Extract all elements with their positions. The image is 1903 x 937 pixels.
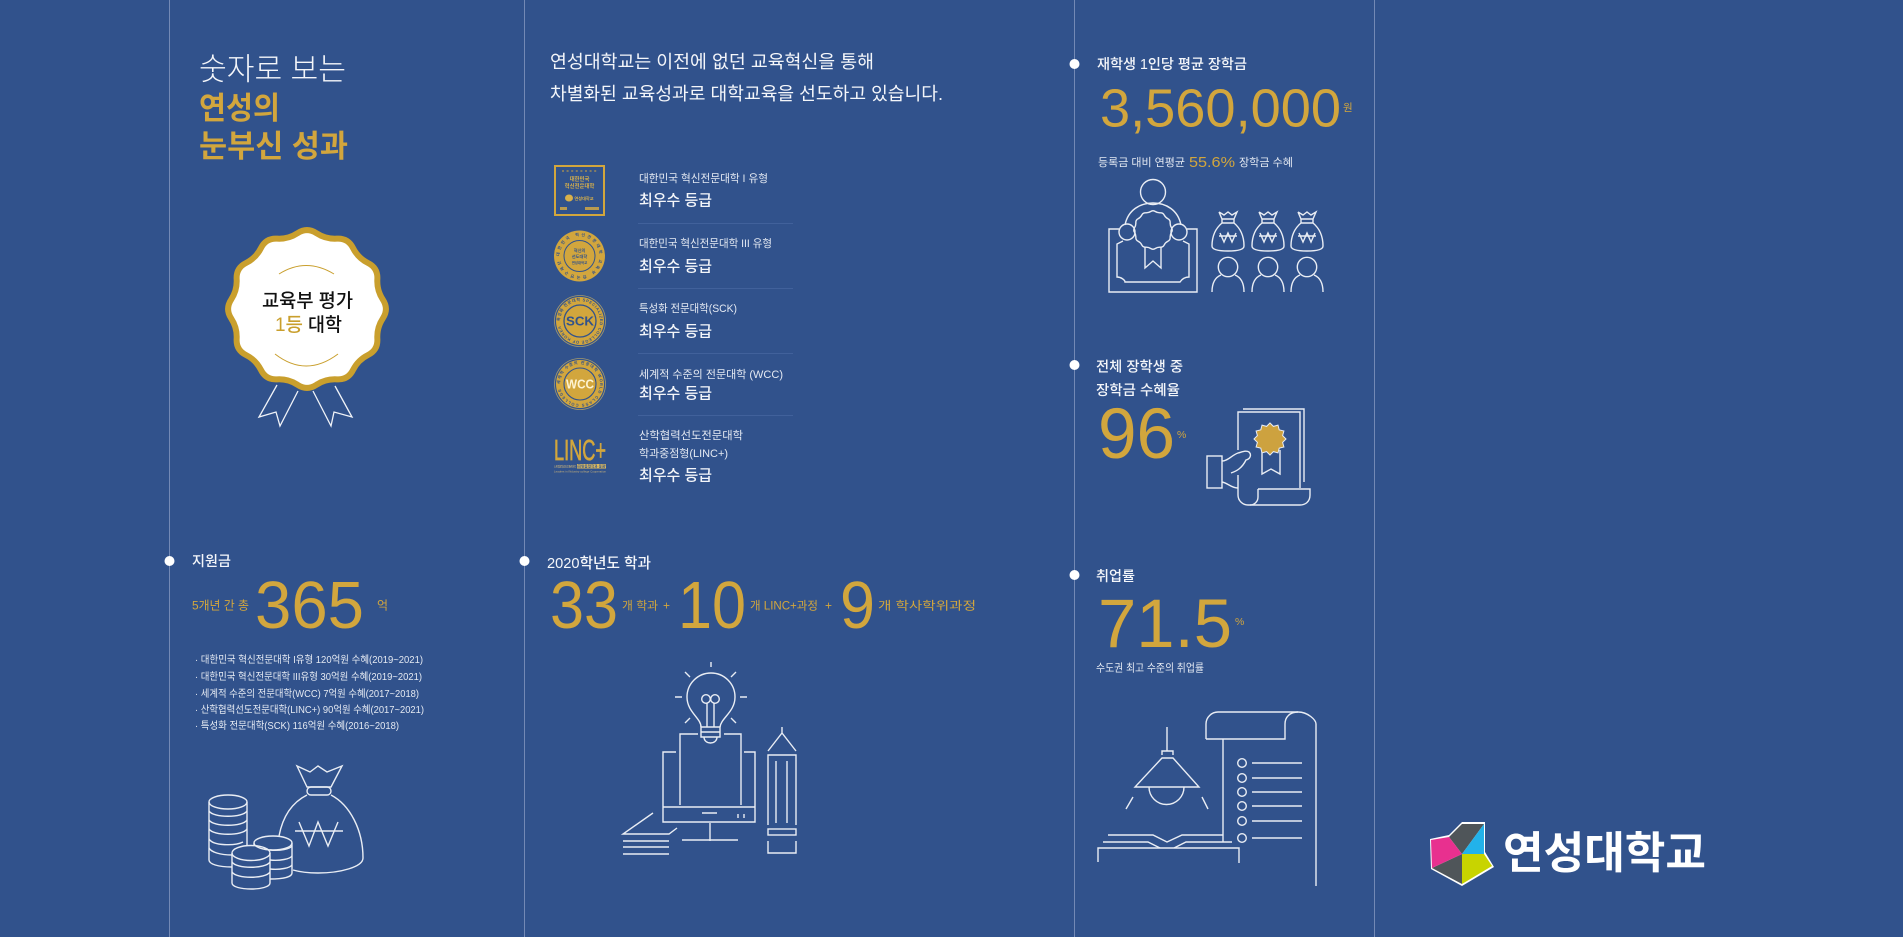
icon: rosette seal (228, 230, 386, 388)
scholarship note: 55.6% (1189, 154, 1235, 171)
big numbers: + (825, 598, 832, 612)
heading: 재학생 1인당 평균 장학금 (1097, 56, 1247, 73)
icon: WCC round badge: WCC (566, 376, 595, 392)
panel: departments (520, 555, 976, 854)
heading: 전체 장학생 중 (1096, 358, 1183, 376)
big number: 원 (1343, 102, 1353, 114)
heading (1096, 358, 1183, 399)
big numbers: 33 (550, 568, 618, 643)
big number (192, 568, 388, 643)
badge text (262, 290, 353, 336)
funding list: · 대한민국 혁신전문대학 I유형 120억원 수혜(2019~2021) (195, 654, 423, 666)
big number: % (1235, 616, 1244, 628)
big numbers: + (663, 598, 670, 612)
big numbers: 개 학과 (622, 600, 658, 612)
icon: LINC+ logo (554, 435, 609, 474)
row 2 text: 대한민국 혁신전문대학 III 유형 (639, 238, 772, 250)
timeline dot (1070, 360, 1080, 370)
big number: % (1177, 429, 1186, 441)
icon: innovation type III round badge: 혁신의 (574, 247, 585, 254)
row 4 text (639, 369, 783, 402)
row 5 text: 학과중점형(LINC+) (639, 448, 728, 460)
icon: innovation type I square badge: 혁신전문대학 (565, 182, 594, 190)
icon: innovation type I square badge (555, 166, 604, 215)
row 4 text: 최우수 등급 (639, 386, 712, 402)
big numbers: 10 (678, 568, 746, 643)
employment note: 수도권 최고 수준의 취업률 (1096, 662, 1204, 674)
icon: lamp, book and document (1098, 712, 1316, 886)
funding list: · 산학협력선도전문대학(LINC+) 90억원 수혜(2017~2021) (195, 703, 424, 716)
icon: LINC+ logo: Leaders in INdustry-college Cooperation (554, 470, 606, 474)
timeline dot (164, 556, 174, 566)
heading: 취업률 (1096, 568, 1135, 585)
intro text: 연성대학교는 이전에 없던 교육혁신을 통해 (550, 51, 874, 72)
scholarship note: 등록금 대비 연평균 (1098, 157, 1185, 169)
row 2 text: 최우수 등급 (639, 258, 712, 276)
row 1 text (639, 173, 768, 210)
big number: 71.5 (1098, 585, 1232, 662)
row 2 text (639, 238, 772, 276)
icon: WCC round badge: 세계적 수준의 전문대학 WORLD CLASS COLLEGE (556, 360, 603, 407)
funding list: · 대한민국 혁신전문대학 III유형 30억원 수혜(2019~2021) (195, 671, 422, 683)
row 3 text: 최우수 등급 (639, 324, 712, 340)
big number: 3,560,000 (1100, 78, 1341, 138)
timeline dot (520, 556, 530, 566)
icon: university emblem (1430, 822, 1494, 886)
award badge (228, 230, 386, 426)
badge text: 교육부 평가 (262, 290, 353, 312)
big number: 억 (377, 598, 388, 612)
row 1 text: 대한민국 혁신전문대학 I 유형 (639, 173, 768, 185)
icon: innovation type III round badge: 선도대학 (572, 253, 587, 260)
big number: 5개년 간 총 (192, 598, 249, 612)
icon: LINC+ logo: LINC+ (554, 435, 606, 467)
scholarship note: 장학금 수혜 (1239, 157, 1293, 169)
icon: SCK round badge: SCK (566, 314, 595, 328)
icon: SCK round badge: 특성화 전문대학 SPECIALIZED COLLEGE OF KOREA (556, 298, 603, 344)
icon: innovation type I square badge: 연성대학교 (574, 195, 594, 202)
funding list: · 특성화 전문대학(SCK) 116억원 수혜(2016~2018) (195, 720, 399, 732)
timeline dot (1070, 59, 1080, 69)
heading: 지원금 (192, 553, 231, 570)
big numbers: 개 학사학위과정 (878, 600, 976, 612)
big number: 96 (1098, 395, 1175, 474)
timeline dot (1070, 570, 1080, 580)
big number: 365 (255, 568, 364, 643)
row 4 text: 세계적 수준의 전문대학 (WCC) (639, 369, 783, 381)
icon: hand holding certificate (1207, 409, 1310, 505)
icon: innovation type III round badge: 연성대학교 (572, 260, 587, 265)
icon: money bags and students (1212, 212, 1323, 292)
row 1 text: 최우수 등급 (639, 192, 712, 210)
icon: light bulb, monitor and pencil (623, 662, 796, 854)
big numbers: 9 (840, 568, 875, 643)
funding list (195, 654, 424, 732)
icon: LINC+ logo: 산학협력선도전문대학 (554, 464, 576, 468)
funding list: · 세계적 수준의 전문대학(WCC) 7억원 수혜(2017~2018) (195, 688, 419, 700)
panel: employment rate (1070, 568, 1316, 886)
intro text (550, 51, 943, 104)
heading: 2020학년도 학과 (547, 555, 651, 572)
icon: innovation type III round badge: 대한민국 혁신전문대학 교육부 한국연구재단 (556, 232, 603, 280)
row 3 text: 특성화 전문대학(SCK) (639, 303, 737, 315)
icon: ribbon tails (259, 385, 352, 426)
intro text: 차별화된 교육성과로 대학교육을 선도하고 있습니다. (550, 83, 943, 104)
row 5 text (639, 429, 743, 484)
badge text: 1등 (275, 315, 303, 336)
title: 눈부신 성과 (199, 129, 348, 164)
icon: person with certificate (1109, 180, 1197, 292)
row 3 text (639, 303, 737, 340)
title (199, 52, 348, 164)
big numbers: 개 LINC+과정 (750, 600, 818, 612)
heading: 장학금 수혜율 (1096, 382, 1180, 399)
icon: coins and money bag (209, 766, 363, 889)
title: 연성의 (199, 91, 280, 126)
panel: funding (164, 553, 424, 889)
university name: 연성대학교 (1503, 829, 1706, 878)
icon: innovation type I square badge: 대한민국 (570, 175, 589, 183)
title: 숫자로 보는 (199, 52, 346, 87)
badge text: 대학 (308, 314, 342, 336)
row 5 text: 최우수 등급 (639, 468, 712, 484)
row 5 text: 산학협력선도전문대학 (639, 429, 743, 442)
scholarship note (1098, 154, 1293, 171)
certification list (554, 165, 793, 484)
icon: LINC+ logo: 사회맞춤형학과 중점형 (574, 464, 609, 468)
big numbers (550, 568, 976, 643)
panel: scholarship per student (1070, 56, 1353, 292)
panel: scholarship rate (1070, 358, 1310, 505)
logo (1430, 822, 1706, 886)
